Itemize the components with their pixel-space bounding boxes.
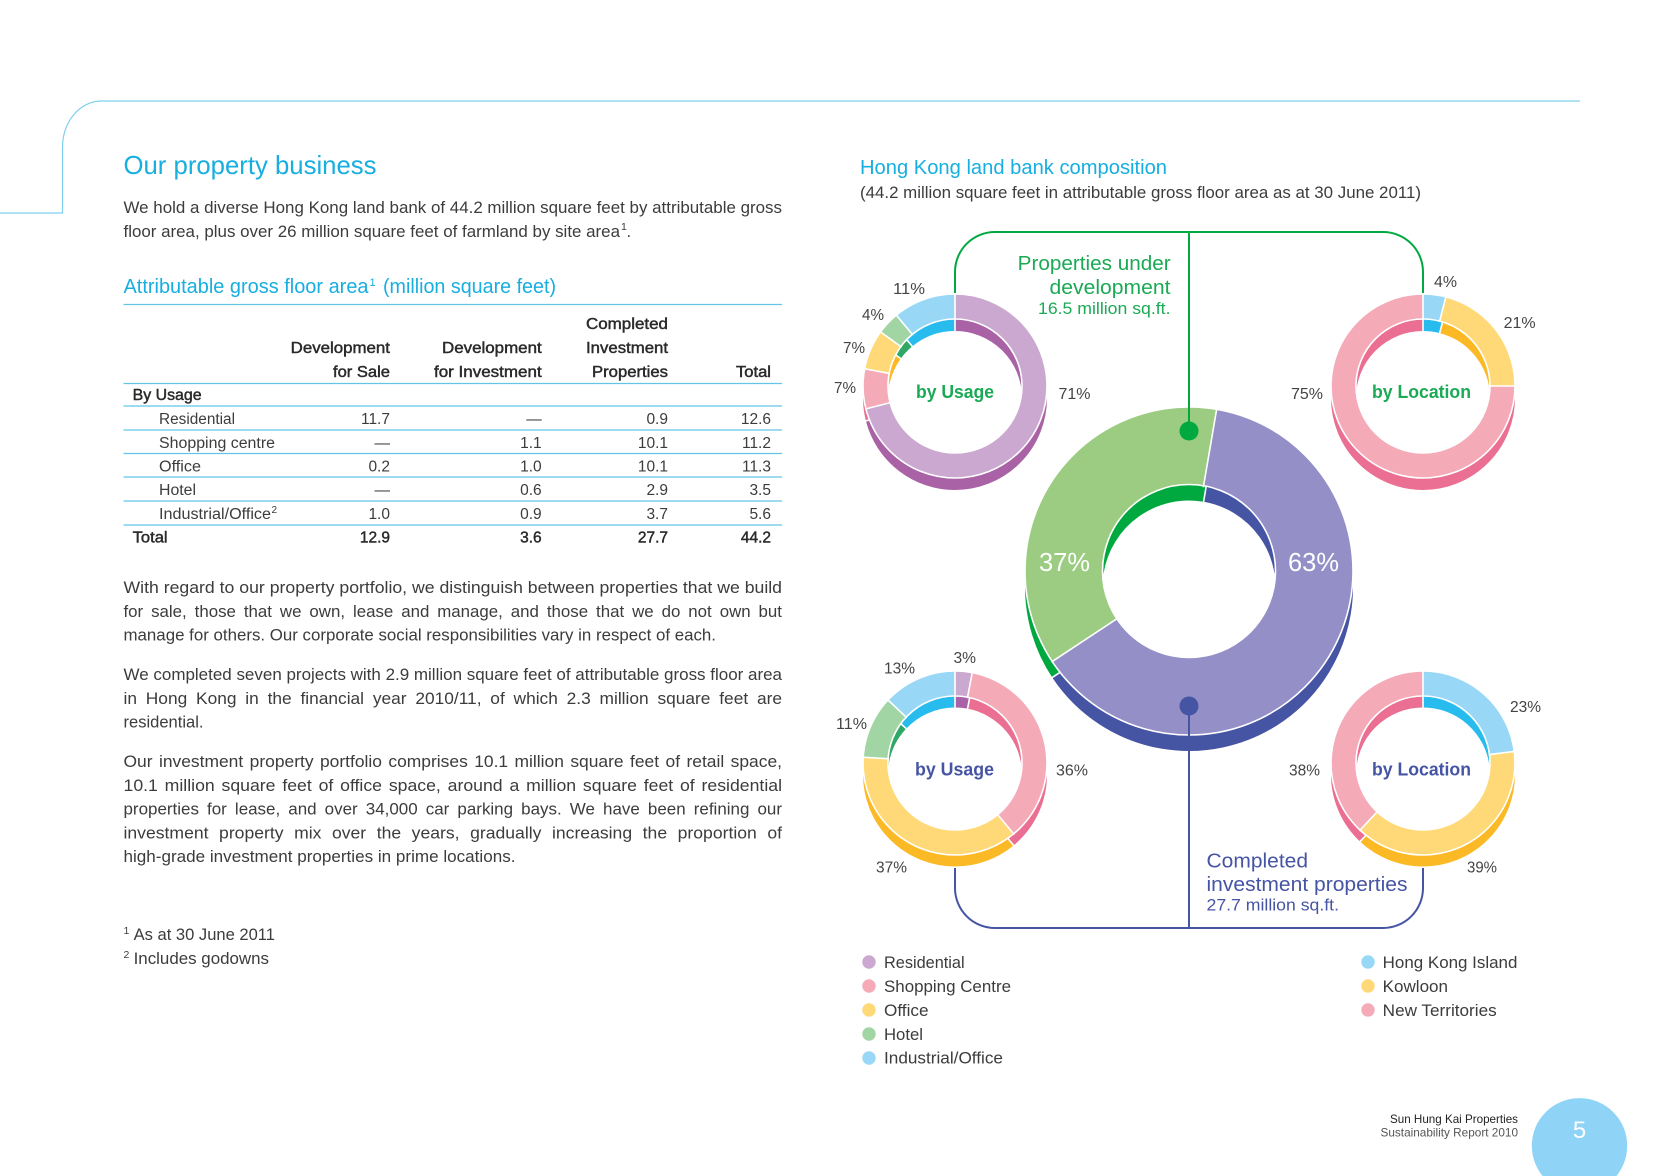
table header row: for Sale <box>333 364 390 381</box>
chart heading: Hong Kong land bank composition <box>860 157 1167 179</box>
table body rows: 2 <box>272 505 278 516</box>
chart heading <box>860 157 1421 202</box>
table body rows: — <box>374 482 390 499</box>
table body rows: 0.9 <box>646 411 668 428</box>
table body rows: 11.2 <box>742 435 771 452</box>
paragraph: investment property portfolio: high-grade investment properties in prime locations. <box>124 848 516 866</box>
legend: usage: Hotel <box>884 1026 923 1044</box>
labels: under development by usage: 7% <box>834 380 856 397</box>
labels: completed investment by location: 38% <box>1289 762 1320 780</box>
footer credit: Sun Hung Kai Properties <box>1390 1112 1518 1126</box>
donut: completed investment by usage <box>862 670 1047 855</box>
donut: under development by location <box>1331 293 1516 478</box>
table body rows: 1.0 <box>520 458 542 476</box>
callout: completed investment properties: 27.7 million sq.ft. <box>1206 896 1339 914</box>
table body rows: 10.1 <box>638 435 668 452</box>
page number badge <box>1532 1098 1627 1176</box>
intro paragraph: floor area, plus over 26 million square feet of farmland by site area <box>124 223 621 241</box>
connector: properties under development <box>955 232 1423 440</box>
table heading <box>124 275 556 298</box>
labels: under development by usage <box>834 281 1090 403</box>
table body rows: 3.7 <box>646 506 668 523</box>
paragraph: investment property portfolio: 10.1 million square feet of office space, around a million square feet of residential <box>124 777 782 795</box>
legend: location: New Territories <box>1383 1002 1497 1020</box>
table body rows: 11.3 <box>742 458 771 476</box>
legend: usage: Shopping Centre <box>884 978 1011 996</box>
legend: location: Hong Kong Island <box>1383 954 1517 972</box>
connector: completed investment properties <box>955 696 1423 928</box>
labels: under development by location: 4% <box>1434 274 1457 291</box>
paragraph: property portfolio: With regard to our property portfolio, we distinguish between properties that we build <box>124 579 782 597</box>
labels: completed investment by usage: 11% <box>836 716 867 733</box>
table body rows: Residential <box>159 411 235 428</box>
table body rows: 1.1 <box>520 435 542 452</box>
table header row <box>133 316 771 404</box>
labels: completed investment by location: 23% <box>1510 699 1541 716</box>
page number badge: 5 <box>1573 1117 1586 1144</box>
intro paragraph: We hold a diverse Hong Kong land bank of 44.2 million square feet by attributable gross <box>124 199 782 217</box>
labels: completed investment by usage: by Usage <box>915 760 994 780</box>
labels: under development by location: by Location <box>1372 382 1471 402</box>
donut: completed investment by location <box>1331 670 1515 855</box>
table body rows: 5.6 <box>749 506 771 523</box>
left column: text and table <box>124 150 783 968</box>
labels: completed investment by usage: 3% <box>954 650 976 667</box>
callout: completed investment properties <box>1206 850 1408 914</box>
paragraph: completed projects <box>124 666 783 732</box>
labels: under development by location: 75% <box>1291 386 1323 403</box>
callout: completed investment properties: investment properties <box>1206 874 1408 896</box>
labels: under development by usage: 71% <box>1058 386 1090 403</box>
footer credit <box>1380 1112 1518 1140</box>
intro paragraph: . <box>626 223 631 241</box>
table total row: 12.9 <box>360 530 390 546</box>
table total row: 3.6 <box>520 530 542 546</box>
table total row: 27.7 <box>638 530 668 546</box>
table header row: Properties <box>592 364 668 381</box>
donut: under development by usage <box>863 293 1047 478</box>
labels: completed investment by usage: 37% <box>876 860 907 876</box>
callout: properties under development <box>1018 253 1171 318</box>
table body rows: 0.9 <box>520 506 542 523</box>
labels: under development by usage: by Usage <box>916 382 994 402</box>
table total row <box>133 530 771 546</box>
labels: under development by usage: 7% <box>843 340 865 357</box>
table body rows: 0.2 <box>368 458 390 476</box>
central percentages <box>1039 547 1339 577</box>
table body rows: Shopping centre <box>159 435 275 452</box>
table body rows: 3.5 <box>749 482 771 499</box>
table body rows: Hotel <box>159 482 196 499</box>
table total row: Total <box>133 530 168 546</box>
callout: completed investment properties: Completed <box>1206 850 1308 872</box>
footnotes: Includes godowns <box>134 950 269 968</box>
table body rows <box>159 411 771 523</box>
paragraph: completed projects: We completed seven projects with 2.9 million square feet of attributable gross floor area <box>124 666 783 684</box>
labels: completed investment by location <box>1289 699 1541 876</box>
labels: completed investment by usage: 13% <box>884 660 915 678</box>
paragraph: investment property portfolio: properties for lease, and over 34,000 car parking bays. We have been refining our <box>124 800 783 818</box>
table body rows: 1.0 <box>368 506 390 523</box>
footnotes: 1 <box>124 925 130 937</box>
table heading: 1 <box>370 277 376 289</box>
table total row: 44.2 <box>741 530 771 546</box>
table body rows: 10.1 <box>638 458 668 476</box>
callout: properties under development: development <box>1050 277 1171 299</box>
legend: location: Kowloon <box>1383 978 1448 996</box>
paragraph: investment property portfolio: Our investment property portfolio comprises 10.1 million square feet of retail space, <box>124 753 782 771</box>
table body rows: 0.6 <box>520 482 542 499</box>
table body rows: 12.6 <box>741 411 771 428</box>
labels: under development by location <box>1291 274 1536 403</box>
donut: central land bank split <box>1025 407 1353 735</box>
intro paragraph: 1 <box>621 221 627 233</box>
footnotes <box>124 925 275 968</box>
legend: usage: Office <box>884 1002 928 1020</box>
paragraph: completed projects: residential. <box>124 714 204 732</box>
labels: under development by usage: 4% <box>862 307 884 324</box>
labels: completed investment by location: by Location <box>1372 760 1471 780</box>
table body rows: — <box>526 411 542 428</box>
paragraph: property portfolio: for sale, those that we own, lease and manage, and those that we do not own but <box>124 603 782 621</box>
table body rows: Industrial/Office <box>159 506 271 523</box>
labels: under development by usage: 11% <box>893 281 925 298</box>
table header row: Development <box>442 340 542 357</box>
paragraph: completed projects: in Hong Kong in the financial year 2010/11, of which 2.3 million square feet are <box>124 690 782 708</box>
footnotes: As at 30 June 2011 <box>134 926 275 944</box>
table body rows: 11.7 <box>361 411 390 428</box>
table: attributable gross floor area <box>124 304 782 546</box>
table body rows: 2.9 <box>646 482 668 499</box>
callout: properties under development: 16.5 million sq.ft. <box>1038 300 1170 318</box>
paragraph: property portfolio: manage for others. Our corporate social responsibilities vary in respect of each. <box>124 626 716 644</box>
table header row: Total <box>736 364 771 381</box>
table heading: (million square feet) <box>383 275 556 298</box>
paragraph: investment property portfolio: investment property mix over the years, gradually increasing the proportion of <box>124 824 782 842</box>
labels: under development by location: 21% <box>1504 315 1536 332</box>
table header row: Investment <box>586 340 669 357</box>
legend: usage <box>862 954 1011 1068</box>
table header row: By Usage <box>133 387 202 404</box>
footer credit: Sustainability Report 2010 <box>1380 1126 1518 1140</box>
central percentages: 37% <box>1039 547 1090 577</box>
legend: location <box>1361 954 1517 1020</box>
legend: usage: Residential <box>884 954 965 972</box>
intro paragraph <box>124 199 782 241</box>
title: Our property business <box>124 150 376 180</box>
central percentages: 63% <box>1288 547 1339 577</box>
footnotes: 2 <box>124 949 130 961</box>
legend: usage: Industrial/Office <box>884 1050 1003 1068</box>
callout: properties under development: Properties under <box>1018 253 1171 275</box>
table header row: Development <box>291 340 391 357</box>
labels: completed investment by usage: 36% <box>1056 762 1088 780</box>
page frame line <box>0 101 1580 213</box>
paragraph: property portfolio <box>124 579 782 644</box>
labels: completed investment by location: 39% <box>1467 860 1497 876</box>
table heading: Attributable gross floor area <box>124 275 369 298</box>
table header row: for Investment <box>434 364 542 381</box>
paragraph: investment property portfolio <box>124 753 783 866</box>
labels: completed investment by usage <box>836 650 1088 876</box>
table body rows: Office <box>159 458 201 476</box>
chart heading: (44.2 million square feet in attributable gross floor area as at 30 June 2011) <box>860 184 1421 202</box>
table header row: Completed <box>586 316 668 333</box>
table body rows: — <box>374 435 390 452</box>
